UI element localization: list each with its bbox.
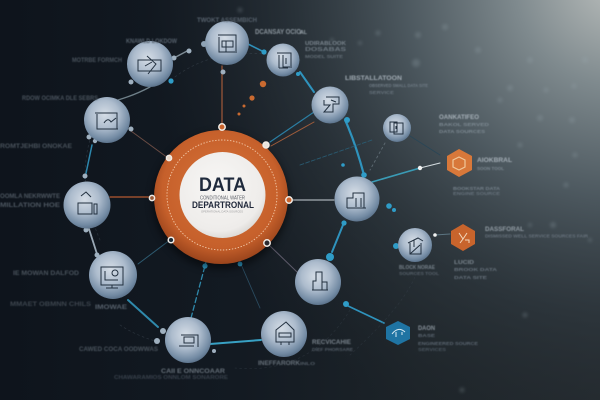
label: left mid: ROMTJEHBI ONOKAE — [0, 143, 73, 150]
ring link: upper right — [300, 72, 314, 92]
icon: house chart — [78, 192, 97, 214]
label: small node: BLOCK NORAE — [399, 265, 436, 271]
central hub — [153, 130, 289, 269]
ring link: top left — [172, 50, 189, 59]
text labels: BASE — [418, 333, 435, 338]
icon: documents — [390, 122, 403, 134]
link to orange hexagon lower — [435, 234, 450, 235]
node 4: left upper — [84, 97, 130, 143]
hub ports — [149, 124, 292, 246]
text labels: DISMISSED WELL SERVICE SOURCES FAIR — [485, 234, 589, 238]
text labels: BOOKSTAR DATA — [453, 186, 501, 191]
label: installation sub: OBSERVED SMALL DATA SITE — [369, 83, 428, 88]
text labels: ENGINE SOURCE — [453, 191, 500, 196]
faint right ring — [235, 268, 418, 369]
ring link: left arc — [85, 145, 92, 178]
icon: box — [347, 193, 366, 208]
label: left lower line 1: OOMLA NEKRWWTE — [0, 193, 61, 200]
hub: dotted ring — [167, 140, 277, 250]
hexagon: orange lower — [451, 224, 475, 251]
node 8: bottom right — [261, 311, 307, 357]
text labels: SOON TOOL — [477, 166, 504, 171]
label: lower orange hexagon: DASSFORAL — [485, 227, 524, 233]
text labels: MODEL SUITE — [305, 54, 343, 59]
label: recognize sub: DIEF PHORSARE — [312, 347, 353, 352]
text labels: DATA SOURCES — [439, 129, 485, 134]
node 9: lower right — [295, 259, 341, 305]
text labels: AL — [300, 30, 308, 36]
label: top right sub: UDIRABLOOK — [305, 41, 346, 47]
faint lower links — [240, 262, 260, 308]
connector: right node to hub — [291, 199, 334, 201]
label: lucid: LUCID — [454, 260, 475, 266]
node 10: right — [334, 176, 380, 222]
node 11: upper right — [312, 86, 348, 124]
label: top right: DCANSAY OCIO — [255, 29, 301, 36]
hub: white disc — [180, 152, 266, 238]
node 3: upper left — [127, 41, 173, 87]
connector lines — [85, 44, 450, 369]
ring link: left lower arc — [89, 229, 97, 254]
label: left upper: RDOW OCIMKA DLE SEBRS — [22, 95, 99, 102]
ring link: upper arcs — [118, 87, 150, 100]
label: bottom right: INEFFARORK — [258, 361, 301, 367]
icon: presentation board — [138, 56, 161, 74]
ring link: lower left arc — [128, 300, 158, 327]
icon: factory — [312, 272, 328, 290]
faint link: middle — [300, 140, 372, 165]
hexagon: blue — [386, 321, 410, 345]
ring link: top right — [248, 44, 264, 52]
label: lower left second: MMAET OBMNN CHILS — [10, 301, 92, 308]
label: top: TWOKT ASSEMBICH — [197, 17, 257, 24]
icon: document — [277, 53, 292, 68]
node 12: small right — [383, 114, 411, 142]
text labels: BROOK DATA — [454, 267, 498, 272]
label: left lower line 2: MILLATION HOE — [0, 202, 61, 209]
label: lower left bold: IMOWAE — [95, 304, 128, 311]
node 6: lower left — [89, 251, 137, 299]
hub: title DATA: DATA — [199, 175, 246, 196]
background bokeh particles — [238, 8, 592, 392]
node 7: bottom left — [165, 317, 211, 363]
label: installation: LIBSTALLATOON — [345, 75, 402, 82]
label: bottom title: CAII E ONNCOAAR — [161, 368, 225, 375]
label: upper left side: MOTRBE FORMCH — [72, 57, 122, 64]
text labels: ENGINEERED SOURCE — [418, 341, 478, 346]
label: lower center: INLO — [300, 361, 316, 366]
connector: top node to hub — [221, 66, 223, 128]
faint dashed link — [370, 143, 385, 170]
label: blue hexagon: DAON — [418, 326, 435, 332]
text labels: BAKOL SERVED — [439, 122, 490, 127]
label: orange hexagon: AIOKBRAL — [477, 158, 512, 164]
icon: house diagram — [408, 238, 423, 254]
icon: tools — [324, 97, 339, 112]
ring link: right to orange hexagon — [372, 168, 420, 182]
node 2: top right — [266, 44, 300, 76]
faint dashed outer ring — [85, 53, 300, 341]
connector: upper right to hub orange — [271, 122, 314, 146]
connector: upper right to hub blue — [270, 112, 314, 142]
icon: framed chart — [218, 35, 236, 53]
text labels: SERVICES — [418, 347, 446, 352]
icon: monitor — [101, 267, 123, 288]
hexagon: orange upper — [447, 149, 472, 177]
label: lower left: IE MOWAN DALFOD — [13, 270, 79, 277]
text labels: DOSABAS — [305, 47, 347, 53]
label: bottom caption: CHAWARAMIOS ONNLOM SONARORE — [114, 375, 229, 381]
ring link: right upper — [346, 122, 364, 175]
label: recognize: RECVICAHIE — [312, 340, 351, 346]
hub: title DEPARTRONAL: DEPARTRONAL — [192, 200, 254, 210]
node 13: right lower — [398, 228, 432, 262]
connector: bottom node to hub — [191, 262, 206, 318]
connector: lower right node to hub — [268, 244, 297, 272]
node 5: left — [64, 182, 110, 228]
icon: laptop — [179, 335, 198, 347]
hub: small caption: OPERATIONAL DATA SOURCES — [201, 210, 243, 214]
hub: small subtitle: CONDITIONAL WATER — [200, 196, 245, 202]
faint link: small node to hexagon — [410, 136, 440, 155]
text labels: DATA SITE — [454, 275, 487, 280]
hub: orange disc — [154, 130, 288, 264]
ring link: right lower — [332, 225, 343, 252]
label: right upper: OANKATIFEO — [439, 115, 479, 121]
ring link: white tip — [420, 163, 440, 168]
icon: screen with graph — [95, 113, 118, 129]
label: upper left title: KNAWLD LOKDOW — [126, 38, 178, 45]
link to blue hexagon — [346, 305, 384, 323]
text labels: SERVICE — [369, 90, 394, 95]
connector: left node to hub — [110, 196, 152, 198]
icon: building sign — [276, 322, 294, 345]
connector: upper left node to hub — [131, 131, 168, 158]
node 1: top — [201, 21, 249, 65]
text labels: SOURCES TOOL — [399, 271, 439, 276]
connector: lower left node to hub — [138, 240, 170, 264]
ring link: bottom arc — [210, 340, 261, 344]
small connector dots — [82, 48, 437, 353]
label: bottom left: CAWED COCA OODWWAS — [79, 346, 159, 353]
